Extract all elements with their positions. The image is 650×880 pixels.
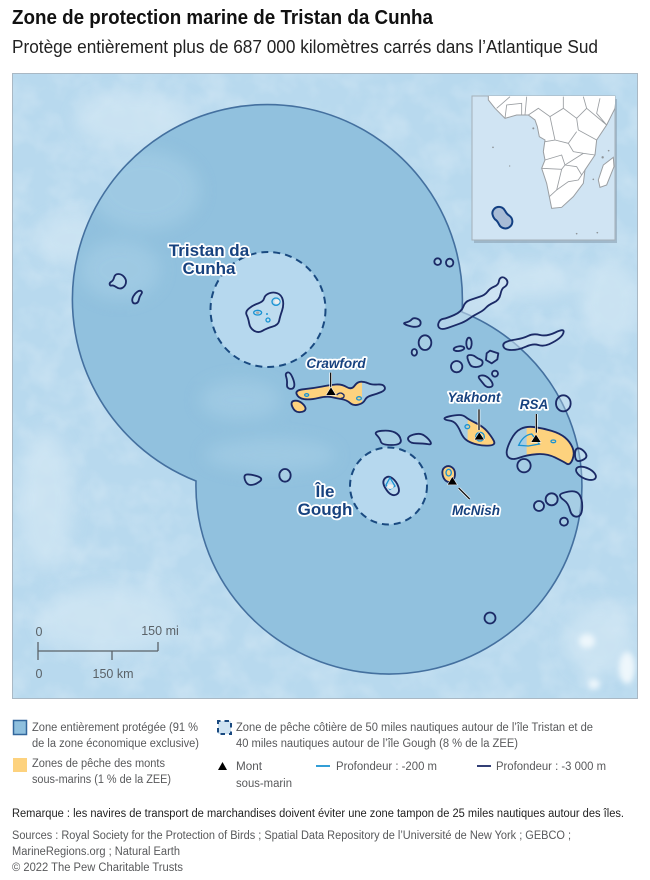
legend: coastal fishing zone: 40 miles nautiques autour de l’île Gough (8 % de la ZEE) (236, 738, 518, 750)
inset EEZ (492, 207, 512, 228)
seamounts and ridges north-east (404, 258, 564, 387)
coastal fishing zone: Gough (350, 448, 427, 524)
scale bar: 0 (36, 667, 43, 681)
scale bar: 150 km (92, 667, 134, 681)
legend: coastal fishing zone: Zone de pêche côtière de 50 miles nautiques autour de l’île Tristan et de (236, 722, 593, 734)
seamounts west (110, 274, 142, 303)
Yakhont seamount (444, 409, 494, 446)
sources (12, 830, 571, 874)
ocean texture (13, 74, 640, 698)
RSA seamount (507, 414, 574, 464)
legend: coastal fishing zone (218, 721, 593, 750)
scale bar: 0 (36, 625, 43, 639)
legend: fully protected: de la zone économique exclusive) (32, 738, 199, 750)
legend: fully protected (14, 720, 199, 750)
sources: Sources : Royal Society for the Protection of Birds ; Spatial Data Repository de l’Université de New York ; GEBCO ; (12, 830, 571, 842)
legend: depth 3000 m: Profondeur : -3 000 m (496, 761, 606, 773)
seamounts south of Crawford (244, 431, 401, 485)
Madagascar (598, 157, 614, 187)
legend: depth 200 m: Profondeur : -200 m (336, 761, 437, 773)
legend: seamount: Mont (236, 761, 263, 773)
scale bar: 150 mi (141, 624, 179, 638)
Africa (488, 93, 617, 208)
inset locator map (472, 93, 617, 243)
legend: fully protected: Zone entièrement protégée (91 % (32, 722, 198, 734)
fully protected zone (EEZ) (72, 105, 582, 674)
Crawford seamount (286, 372, 385, 412)
McNish seamount (442, 466, 470, 499)
legend: seamount fishing zones: Zones de pêche des monts (32, 758, 165, 770)
legend: seamount fishing zones (13, 758, 171, 786)
legend: seamount (218, 761, 292, 790)
title: Zone de protection marine de Tristan da Cunha (12, 6, 434, 29)
subtitle: Protège entièrement plus de 687 000 kilomètres carrés dans l’Atlantique Sud (12, 37, 598, 57)
sources: © 2022 The Pew Charitable Trusts (12, 862, 183, 874)
label: Crawford: Crawford (306, 356, 366, 371)
Tristan da Cunha islands (246, 292, 283, 332)
label: Tristan da Cunha: Cunha (183, 259, 236, 278)
legend: seamount: sous-marin (236, 778, 292, 790)
note: Remarque : les navires de transport de marchandises doivent éviter une zone tampon de 25 miles nautiques autour des îles. (12, 808, 624, 820)
label: Tristan da Cunha (169, 241, 250, 278)
seamount: far south circle (484, 612, 496, 624)
label: Île Gough (298, 482, 352, 519)
label: RSA: RSA (520, 397, 548, 412)
legend: seamount fishing zones: sous-marins (1 % de la ZEE) (32, 774, 171, 786)
label: Île Gough: Gough (298, 500, 352, 519)
panel: map (12, 74, 640, 698)
sources: MarineRegions.org ; Natural Earth (12, 846, 180, 858)
label: Île Gough: Île (315, 482, 334, 501)
legend (13, 720, 606, 790)
label: Tristan da Cunha: Tristan da (169, 241, 250, 260)
label: McNish: McNish (452, 503, 500, 518)
eastern seamounts (408, 395, 598, 526)
coastal fishing zone: Tristan (210, 252, 326, 367)
scale bar (36, 624, 179, 681)
Gough island (383, 477, 399, 495)
label: Yakhont: Yakhont (448, 390, 501, 405)
